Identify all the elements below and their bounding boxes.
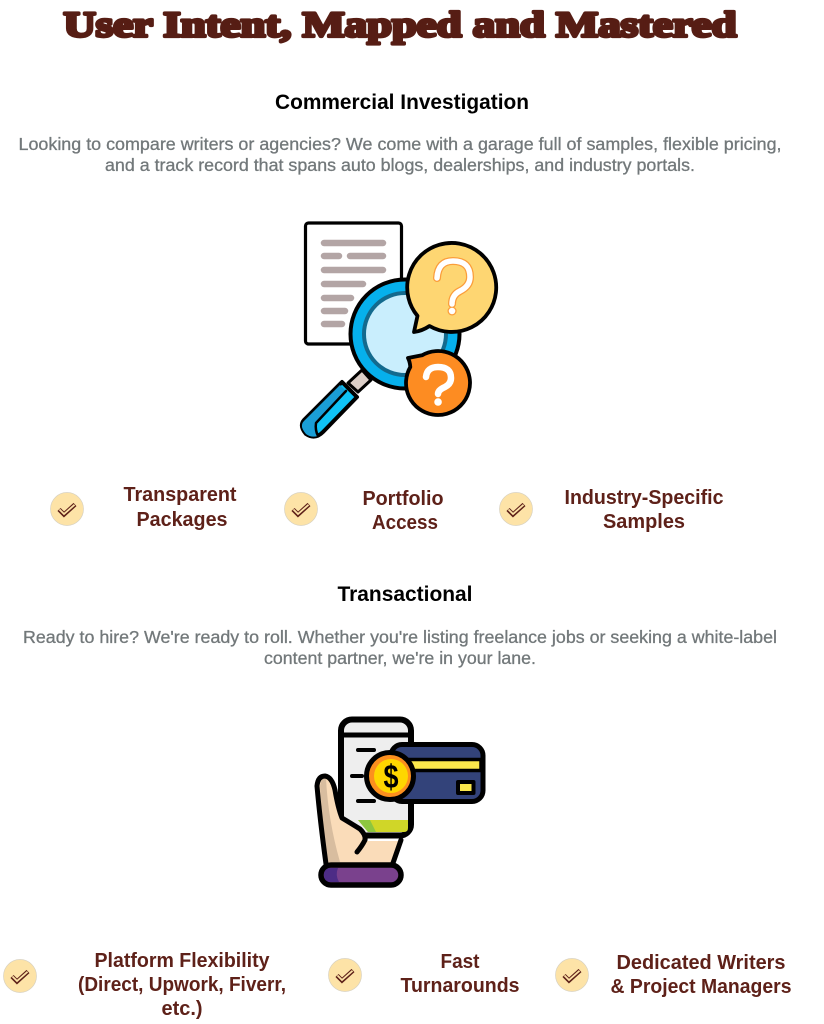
coin: [366, 752, 414, 800]
hand: [317, 776, 401, 864]
magnifier neck: [348, 370, 371, 392]
magnifier lens: [350, 280, 460, 388]
title: User Intent, Mapped and Mastered: [64, 4, 736, 44]
feature: Transparent Packages: Packages: [136, 509, 228, 531]
feature: Fast Turnarounds: Turnarounds: [400, 975, 520, 997]
feature: Dedicated Writers & Project Managers: Dedicated Writers: [616, 952, 786, 974]
feature: Transparent Packages: [50, 484, 237, 531]
orange question bubble: [406, 351, 470, 415]
feature: Portfolio Access: Access: [372, 512, 438, 534]
section: transactional: [4, 583, 792, 1020]
feature: Dedicated Writers & Project Managers: & Project Managers: [610, 976, 792, 998]
heading: Transactional: Transactional: [338, 583, 472, 606]
coin: $: [384, 758, 398, 795]
feature: Industry-Specific Samples: [500, 487, 724, 533]
document: [306, 223, 402, 344]
yellow question bubble: [407, 243, 496, 332]
text block: commercial intro: Looking to compare writers or agencies? We come with a garage full of samples, flexible pricing,: [18, 134, 781, 154]
feature: Portfolio Access: [284, 488, 444, 534]
text block: transactional intro: content partner, we're in your lane.: [264, 648, 536, 668]
text block: transactional intro: [23, 627, 777, 668]
heading: Commercial Investigation: Commercial Investigation: [275, 91, 529, 114]
icon: magnifier with document and question bubbles: [302, 223, 496, 437]
text block: commercial intro: [18, 134, 781, 175]
feature: Portfolio Access: Portfolio: [362, 488, 444, 510]
text block: commercial intro: and a track record that spans auto blogs, dealerships, and industry portals.: [105, 155, 695, 175]
feature: Platform Flexibility: etc.): [162, 998, 202, 1020]
phone: [341, 720, 411, 836]
feature: Platform Flexibility: (Direct, Upwork, Fiverr,: [78, 974, 286, 996]
feature: Industry-Specific Samples: Samples: [603, 511, 685, 533]
credit card: [391, 744, 483, 802]
icon: hand holding phone with credit card and coin: [317, 720, 483, 885]
text block: transactional intro: Ready to hire? We're ready to roll. Whether you're listing freelance jobs or seeking a white-label: [23, 627, 777, 647]
feature: Fast Turnarounds: [328, 951, 520, 997]
feature: Platform Flexibility: Platform Flexibility: [94, 950, 270, 972]
feature: Transparent Packages: Transparent: [124, 484, 237, 506]
purple cuff: [321, 865, 401, 885]
feature: Industry-Specific Samples: Industry-Specific: [564, 487, 724, 509]
feature: Platform Flexibility: [4, 950, 286, 1020]
magnifier handle: [302, 382, 357, 437]
feature: Dedicated Writers & Project Managers: [556, 952, 792, 998]
section: commercial investigation: [18, 91, 781, 534]
feature: Fast Turnarounds: Fast: [440, 951, 480, 973]
